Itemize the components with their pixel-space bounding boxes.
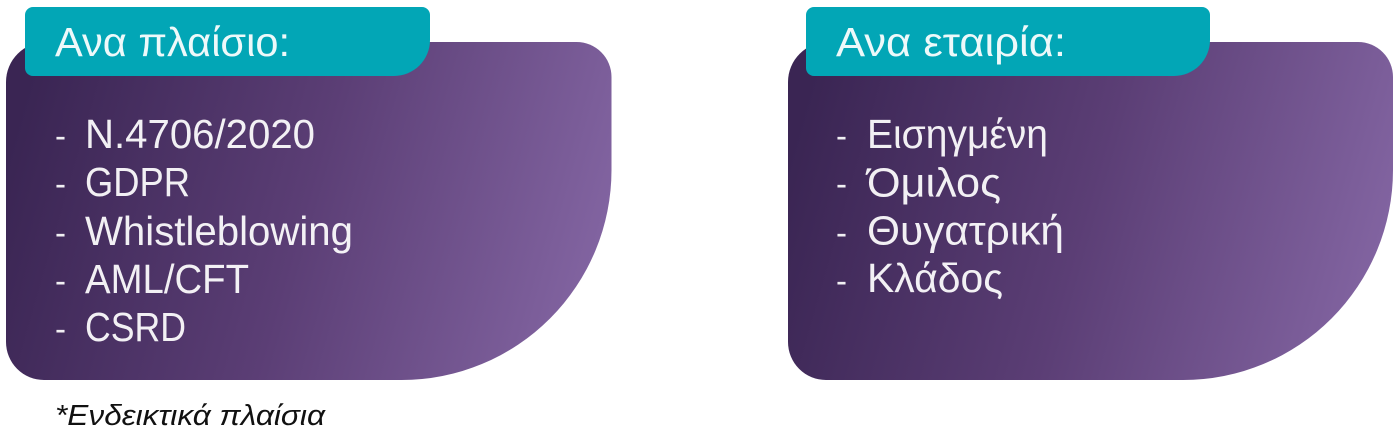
list: frameworks: CSRD (85, 304, 186, 350)
panel: by framework (6, 7, 612, 380)
list: frameworks: AML/CFT (85, 256, 249, 302)
heading tab (806, 7, 1210, 76)
list: company types: - (836, 262, 847, 299)
panel background (788, 42, 1393, 380)
list: frameworks: - (55, 117, 66, 154)
list: frameworks: GDPR (85, 159, 190, 205)
list: frameworks: - (55, 165, 66, 202)
footnote: *Ενδεικτικά πλαίσια (55, 400, 327, 432)
list: company types: - (836, 117, 847, 154)
list: company types (836, 111, 1064, 301)
list: frameworks: - (55, 262, 66, 299)
panel background (6, 42, 612, 380)
list: company types: Κλάδος (867, 255, 1003, 301)
list: company types: Εισηγμένη (867, 111, 1048, 157)
list: frameworks (55, 111, 353, 350)
list: frameworks: N.4706/2020 (85, 111, 315, 157)
list: company types: Θυγατρική (867, 208, 1064, 254)
panel: by company (788, 7, 1393, 380)
heading tab (25, 7, 430, 76)
list: frameworks: - (55, 214, 66, 251)
list: company types: Όμιλος (865, 160, 1001, 206)
list: frameworks: Whistleblowing (85, 208, 353, 254)
list: company types: - (836, 165, 847, 202)
heading tab: Ανα εταιρία: (836, 19, 1066, 65)
heading tab: Ανα πλαίσιο: (55, 19, 290, 65)
list: company types: - (836, 214, 847, 251)
list: frameworks: - (55, 310, 66, 347)
